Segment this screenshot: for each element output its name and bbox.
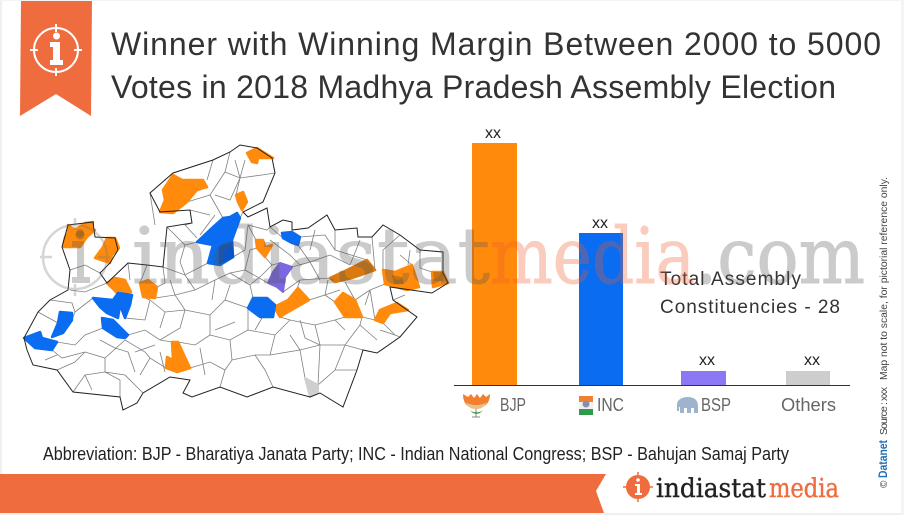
coloured constituencies: INC [24,213,300,350]
icon: BSP elephant [677,397,698,413]
category labels: INC [597,395,624,415]
footer band [0,474,606,513]
abbreviation note: Abbreviation: BJP - Bharatiya Janata Party; INC - Indian National Congress; BSP - Bahujan Samaj Party [43,444,789,464]
bar value labels [485,125,820,369]
source note [876,177,890,488]
icon: BJP lotus [463,394,490,417]
source note: Source : xxx [878,386,890,435]
watermark: indiastat [132,212,490,302]
title: Votes in 2018 Madhya Pradesh Assembly Election [111,69,836,105]
watermark: .com [695,212,865,302]
source note: Map not to scale, for pictorial reference only. [878,177,890,380]
coloured constituency: BSP [268,263,292,292]
logo: indiastatmedia: media [769,474,839,504]
bar value labels: xx [804,352,820,369]
title [111,26,881,105]
bar value labels: xx [592,215,608,232]
constituency borders [38,152,432,397]
icon: INC flag [579,396,593,415]
logo: indiastatmedia [623,472,839,504]
coloured constituencies: BJP [63,148,448,372]
icon: info ribbon [20,1,92,116]
logo: indiastatmedia: indiastat [656,474,767,504]
map: Madhya Pradesh constituencies [24,145,448,410]
bar: Others [786,371,830,385]
bar value labels: xx [485,125,501,142]
callout: total assembly constituencies: Constituencies - 28 [660,297,840,318]
source note: © [879,480,890,488]
map outline fill [24,145,448,410]
category labels: Others [781,395,836,415]
category labels: BSP [701,395,731,415]
bar chart [454,125,850,417]
callout: total assembly constituencies [660,269,840,318]
category labels: BJP [500,395,526,415]
state outline [24,145,448,410]
coloured constituency: Others [305,378,318,397]
bar value labels: xx [699,352,715,369]
category labels [500,395,836,415]
dark overlaps [76,230,444,284]
title: Winner with Winning Margin Between 2000 to 5000 [111,26,881,62]
watermark [40,212,865,302]
watermark: media [490,212,695,302]
bar: INC [579,233,623,385]
callout: total assembly constituencies: Total Assembly [660,269,802,290]
bar: BSP [681,371,726,385]
source note: Datanet [876,440,890,478]
bar: BJP [472,143,517,385]
